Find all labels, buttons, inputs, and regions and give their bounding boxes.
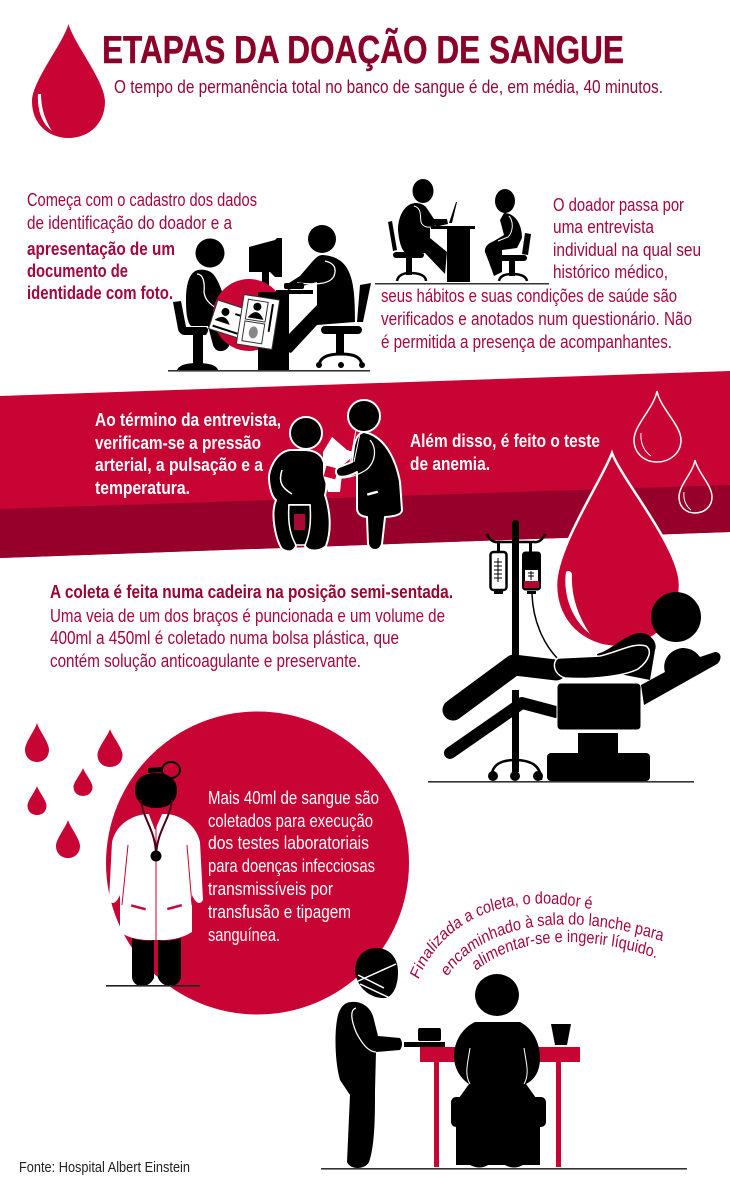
text block: registration xyxy=(27,189,257,303)
text block: interview: O doador passa por xyxy=(553,194,684,215)
text block: registration: documento de xyxy=(27,260,128,281)
icon: seated donor xyxy=(321,974,687,1170)
panel: red diagonal band xyxy=(0,371,730,558)
icon: small drops xyxy=(25,723,122,858)
title: ETAPAS DA DOAÇÃO DE SANGUE xyxy=(102,28,624,72)
text block: vital signs xyxy=(95,409,281,498)
icon: donation chair with patient xyxy=(428,592,721,783)
icon: fingerprint document xyxy=(236,294,280,350)
text block: collection xyxy=(50,581,453,671)
icon: registration desk scene xyxy=(168,225,371,372)
icon: identity card xyxy=(209,300,248,338)
text block: curved snack caption: Finalizada a coleta, o doador é xyxy=(410,891,592,979)
text block: registration: Começa com o cadastro dos dados xyxy=(27,189,257,210)
icon: large blood drop xyxy=(556,453,680,647)
text block: vital signs: arterial, a pulsação e a xyxy=(95,454,264,475)
icon: IV stand with bags xyxy=(487,520,557,781)
text block: lab tests xyxy=(208,787,379,945)
icon: outlined drop small xyxy=(679,460,712,513)
text block: lab tests: para doenças infecciosas xyxy=(208,855,375,876)
text block: lab tests: dos testes laboratoriais xyxy=(208,832,369,853)
text block: curved snack caption: alimentar-se e ingerir líquido. xyxy=(473,930,656,970)
text block: lab tests: transfusão e tipagem xyxy=(208,901,351,922)
text block: curved snack caption xyxy=(410,891,663,979)
text block: interview: individual na qual seu xyxy=(553,239,701,260)
text block: interview: histórico médico, xyxy=(553,261,668,282)
text block: registration: de identificação do doador e a xyxy=(27,212,233,233)
icon: snack table xyxy=(404,1024,580,1167)
icon: interview scene xyxy=(375,179,549,284)
text block: vital signs: verificam-se a pressão xyxy=(95,432,261,453)
text block: collection: contém solução anticoagulante e preservante. xyxy=(50,650,361,671)
icon: doctor xyxy=(106,762,203,987)
icon: server with mask xyxy=(336,948,402,1168)
text block: curved snack caption: encaminhado à sala do lanche para xyxy=(442,912,663,975)
text block: interview: uma entrevista xyxy=(553,216,655,237)
icon: outlined drop large xyxy=(634,391,681,462)
text block: lab tests: Mais 40ml de sangue são xyxy=(208,787,379,808)
text block: collection: 400ml a 450ml é coletado numa bolsa plástica, que xyxy=(50,627,399,648)
panel: red circle xyxy=(106,712,409,1014)
text block: vital signs: Ao término da entrevista, xyxy=(95,409,281,430)
text block: anemia test: de anemia. xyxy=(410,453,490,474)
icon: blood pressure scene xyxy=(269,400,402,551)
text block: collection: Uma veia de um dos braços é puncionada e um volume de xyxy=(50,605,445,626)
source credit: Fonte: Hospital Albert Einstein xyxy=(19,1160,190,1176)
icon: header blood drop xyxy=(32,24,105,138)
text block: interview: é permitida a presença de acompanhantes. xyxy=(381,331,672,352)
text block: vital signs: temperatura. xyxy=(95,477,190,498)
text block: anemia test: Além disso, é feito o teste xyxy=(410,430,600,451)
text block: registration: apresentação de um xyxy=(27,238,175,259)
text block: registration: identidade com foto. xyxy=(27,282,173,303)
text block: collection: A coleta é feita numa cadeira na posição semi-sentada. xyxy=(50,581,453,602)
text block: lab tests: coletados para execução xyxy=(208,810,373,831)
text block: lab tests: transmissíveis por xyxy=(208,878,333,899)
text block: interview xyxy=(381,194,701,352)
text block: anemia test xyxy=(410,430,600,474)
text block: lab tests: sanguínea. xyxy=(208,924,280,945)
